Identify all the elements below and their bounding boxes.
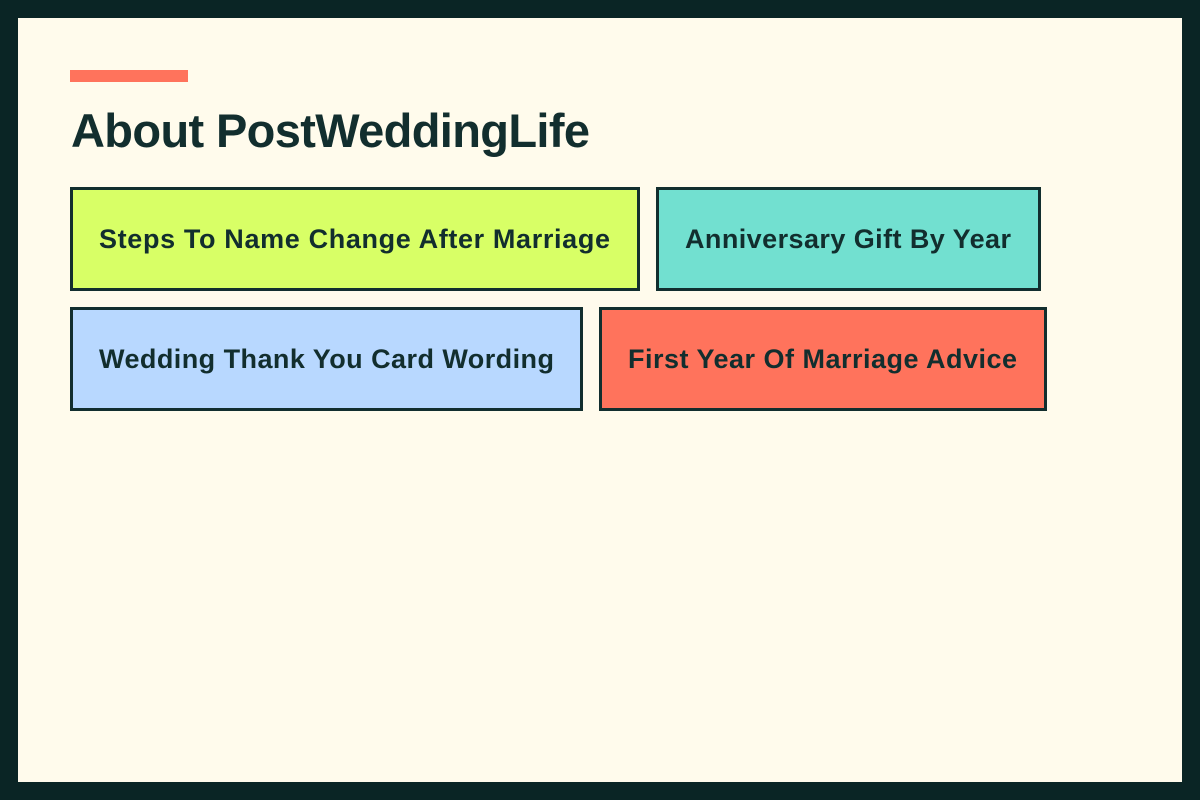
- tag: Steps To Name Change After Marriage: Steps To Name Change After Marriage: [99, 224, 610, 254]
- tag: First Year Of Marriage Advice: [600, 308, 1046, 410]
- tag: Wedding Thank You Card Wording: Wedding Thank You Card Wording: [99, 344, 554, 374]
- tag: Anniversary Gift By Year: Anniversary Gift By Year: [685, 224, 1011, 254]
- accent bar: [70, 70, 188, 82]
- title: About PostWeddingLife: [71, 104, 590, 157]
- tag: Wedding Thank You Card Wording: [72, 308, 582, 410]
- tag: Steps To Name Change After Marriage: [72, 188, 638, 290]
- tag: First Year Of Marriage Advice: First Year Of Marriage Advice: [628, 344, 1017, 374]
- tag: Anniversary Gift By Year: [658, 188, 1040, 290]
